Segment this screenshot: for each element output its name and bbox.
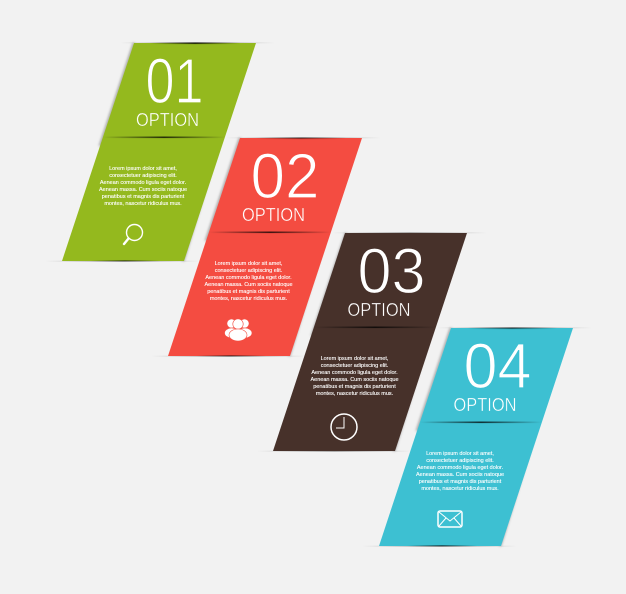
body text: consectetuer adipiscing elit. xyxy=(109,173,177,179)
number 02: 02 xyxy=(250,140,320,212)
number 01: 01 xyxy=(146,45,204,117)
divider shadow xyxy=(314,326,436,328)
body text: Aenean commodo ligula eget dolor. xyxy=(311,370,398,376)
body text: penatibus et magnis dis parturient xyxy=(207,289,290,295)
body text: Aenean massa. Cum sociis natoque xyxy=(310,377,399,383)
icon: clock xyxy=(331,414,357,440)
body text: Lorem ipsum dolor sit amet, xyxy=(426,451,494,457)
body text: penatibus et magnis dis parturient xyxy=(419,479,502,485)
body text: consectetuer adipiscing elit. xyxy=(215,268,283,274)
divider shadow xyxy=(103,136,225,138)
body text: Aenean massa. Cum sociis natoque xyxy=(99,187,187,193)
body text: penatibus et magnis dis parturient xyxy=(102,194,185,200)
panel: option 02 xyxy=(151,137,381,357)
icon: magnifier xyxy=(124,224,142,244)
panel: option 01 xyxy=(45,42,275,262)
body text: penatibus et magnis dis parturient xyxy=(313,384,396,390)
icon: people xyxy=(224,319,252,341)
body text: montes, nascetur ridiculus mus. xyxy=(316,391,394,397)
body text: Aenean commodo ligula eget dolor. xyxy=(417,465,504,471)
option heading: OPTION xyxy=(242,205,305,225)
body text: Aenean massa. Cum sociis natoque xyxy=(416,472,504,478)
body text: montes, nascetur ridiculus mus. xyxy=(421,486,499,492)
body text: consectetuer adipiscing elit. xyxy=(426,458,494,464)
panel: option 04 xyxy=(362,327,592,547)
body text: Aenean massa. Cum sociis natoque xyxy=(204,282,293,288)
body text: Lorem ipsum dolor sit amet, xyxy=(109,166,177,172)
body text: Aenean commodo ligula eget dolor. xyxy=(205,275,292,281)
body text: montes, nascetur ridiculus mus. xyxy=(104,201,182,207)
number 03: 03 xyxy=(358,235,426,307)
panel: option 03 xyxy=(257,232,487,452)
body text: montes, nascetur ridiculus mus. xyxy=(210,296,288,302)
option heading: OPTION xyxy=(136,110,199,130)
option heading: OPTION xyxy=(454,395,516,415)
number 04: 04 xyxy=(464,330,532,402)
body text: Lorem ipsum dolor sit amet, xyxy=(215,261,283,267)
body text: Aenean commodo ligula eget dolor. xyxy=(100,180,187,186)
body text: consectetuer adipiscing elit. xyxy=(321,363,389,369)
body text: Lorem ipsum dolor sit amet, xyxy=(321,356,389,362)
icon: envelope xyxy=(438,511,462,527)
option heading: OPTION xyxy=(348,300,410,320)
divider shadow xyxy=(209,232,331,233)
divider shadow xyxy=(420,422,542,423)
